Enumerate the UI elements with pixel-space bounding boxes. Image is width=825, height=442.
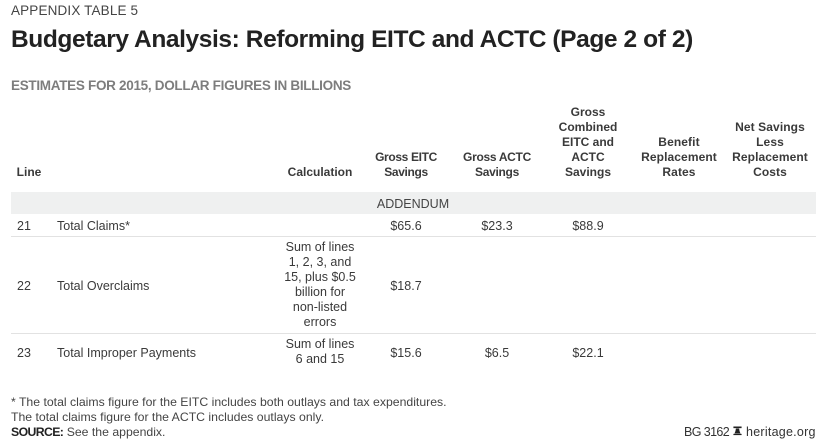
row 21: 21 <box>17 219 31 233</box>
row 22: 22 <box>17 279 31 293</box>
credit: bulletin number: BG 3162 <box>684 425 729 439</box>
addendum label: ADDENDUM <box>377 197 449 211</box>
column header: net savings: Less <box>756 135 784 149</box>
row 22 <box>17 240 422 329</box>
row 23: $6.5 <box>485 346 509 360</box>
row 22: 1, 2, 3, and <box>289 255 351 269</box>
column header: gross combined savings: EITC and <box>562 135 614 149</box>
credit: website: heritage.org <box>746 425 816 439</box>
footnote: The total claims figure for the ACTC includes outlays only. <box>11 410 324 424</box>
icon: liberty bell <box>733 426 742 436</box>
row 21 <box>17 219 604 233</box>
row 21: $23.3 <box>481 219 513 233</box>
title: Budgetary Analysis: Reforming EITC and ACTC (Page 2 of 2) <box>11 26 693 53</box>
row 23: Sum of lines <box>286 337 354 351</box>
column header: gross ACTC savings: Savings <box>475 165 519 179</box>
row 22: Sum of lines <box>286 240 354 254</box>
column header: gross EITC savings <box>375 150 437 179</box>
row 22: 15, plus $0.5 <box>284 270 356 284</box>
row 22: Total Overclaims <box>57 279 149 293</box>
column header: gross EITC savings: Gross EITC <box>375 150 437 164</box>
column header: gross combined savings: ACTC <box>571 150 605 164</box>
column header: net savings: Net Savings <box>735 120 805 134</box>
row 22: billion for <box>295 285 345 299</box>
row 21: $88.9 <box>572 219 604 233</box>
column header: gross combined savings: Gross <box>571 105 605 119</box>
row 23: Total Improper Payments <box>57 346 196 360</box>
row 21: Total Claims* <box>57 219 130 233</box>
footnote: SOURCE: See the appendix. <box>11 425 165 439</box>
column header: benefit replacement rates: Benefit <box>658 135 700 149</box>
column header: net savings: Replacement <box>732 150 808 164</box>
column header: gross combined savings <box>559 105 617 179</box>
column header: gross ACTC savings <box>463 150 531 179</box>
column header: benefit replacement rates: Rates <box>662 165 696 179</box>
column header: calculation: Calculation <box>288 165 352 179</box>
column header: gross EITC savings: Savings <box>384 165 428 179</box>
row 23: $22.1 <box>572 346 604 360</box>
column header: net savings: Costs <box>753 165 787 179</box>
row 22: non-listed <box>293 300 347 314</box>
column header: gross combined savings: Combined <box>559 120 617 134</box>
row 22: errors <box>304 315 336 329</box>
column header: line: Line <box>17 165 41 179</box>
footnote <box>11 395 447 439</box>
footnote: * The total claims figure for the EITC includes both outlays and tax expenditures. <box>11 395 447 409</box>
appendix label: APPENDIX TABLE 5 <box>11 3 138 18</box>
column header: gross combined savings: Savings <box>565 165 611 179</box>
column header: gross ACTC savings: Gross ACTC <box>463 150 531 164</box>
column header: benefit replacement rates <box>641 135 717 179</box>
row 23: $15.6 <box>390 346 422 360</box>
row 22: $18.7 <box>390 279 422 293</box>
column header: benefit replacement rates: Replacement <box>641 150 717 164</box>
row 23 <box>17 337 604 366</box>
addendum band <box>11 192 816 214</box>
row 23: 23 <box>17 346 31 360</box>
column header: net savings <box>732 120 808 179</box>
row 23: 6 and 15 <box>296 352 344 366</box>
row 21: $65.6 <box>390 219 422 233</box>
subtitle: ESTIMATES FOR 2015, DOLLAR FIGURES IN BILLIONS <box>11 78 351 93</box>
